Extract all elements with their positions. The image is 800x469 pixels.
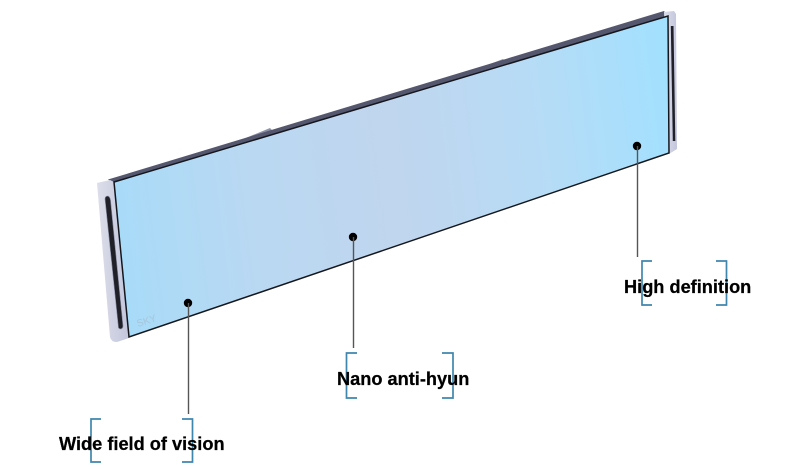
left end cap xyxy=(97,180,129,342)
leader line xyxy=(188,303,190,414)
callout: wide field of vision xyxy=(59,299,225,462)
top edge xyxy=(108,11,669,184)
dot xyxy=(349,233,357,241)
right slot xyxy=(671,26,675,141)
callout: nano anti-hyun xyxy=(337,233,469,398)
left slot xyxy=(105,196,123,329)
top clips xyxy=(236,59,507,146)
right end cap xyxy=(664,11,677,154)
leader line xyxy=(636,146,638,257)
label: Nano anti-hyun xyxy=(337,369,469,389)
label: Wide field of vision xyxy=(59,434,225,454)
brackets xyxy=(346,353,453,398)
mirror product xyxy=(97,11,677,342)
leader line xyxy=(352,237,354,348)
dot xyxy=(184,299,192,307)
label: High definition xyxy=(624,277,751,297)
dot xyxy=(633,142,641,150)
brackets xyxy=(91,419,192,462)
brackets xyxy=(642,261,726,305)
logo mark: SKY xyxy=(136,313,158,330)
callout: high definition xyxy=(624,142,751,305)
glass xyxy=(114,16,669,337)
